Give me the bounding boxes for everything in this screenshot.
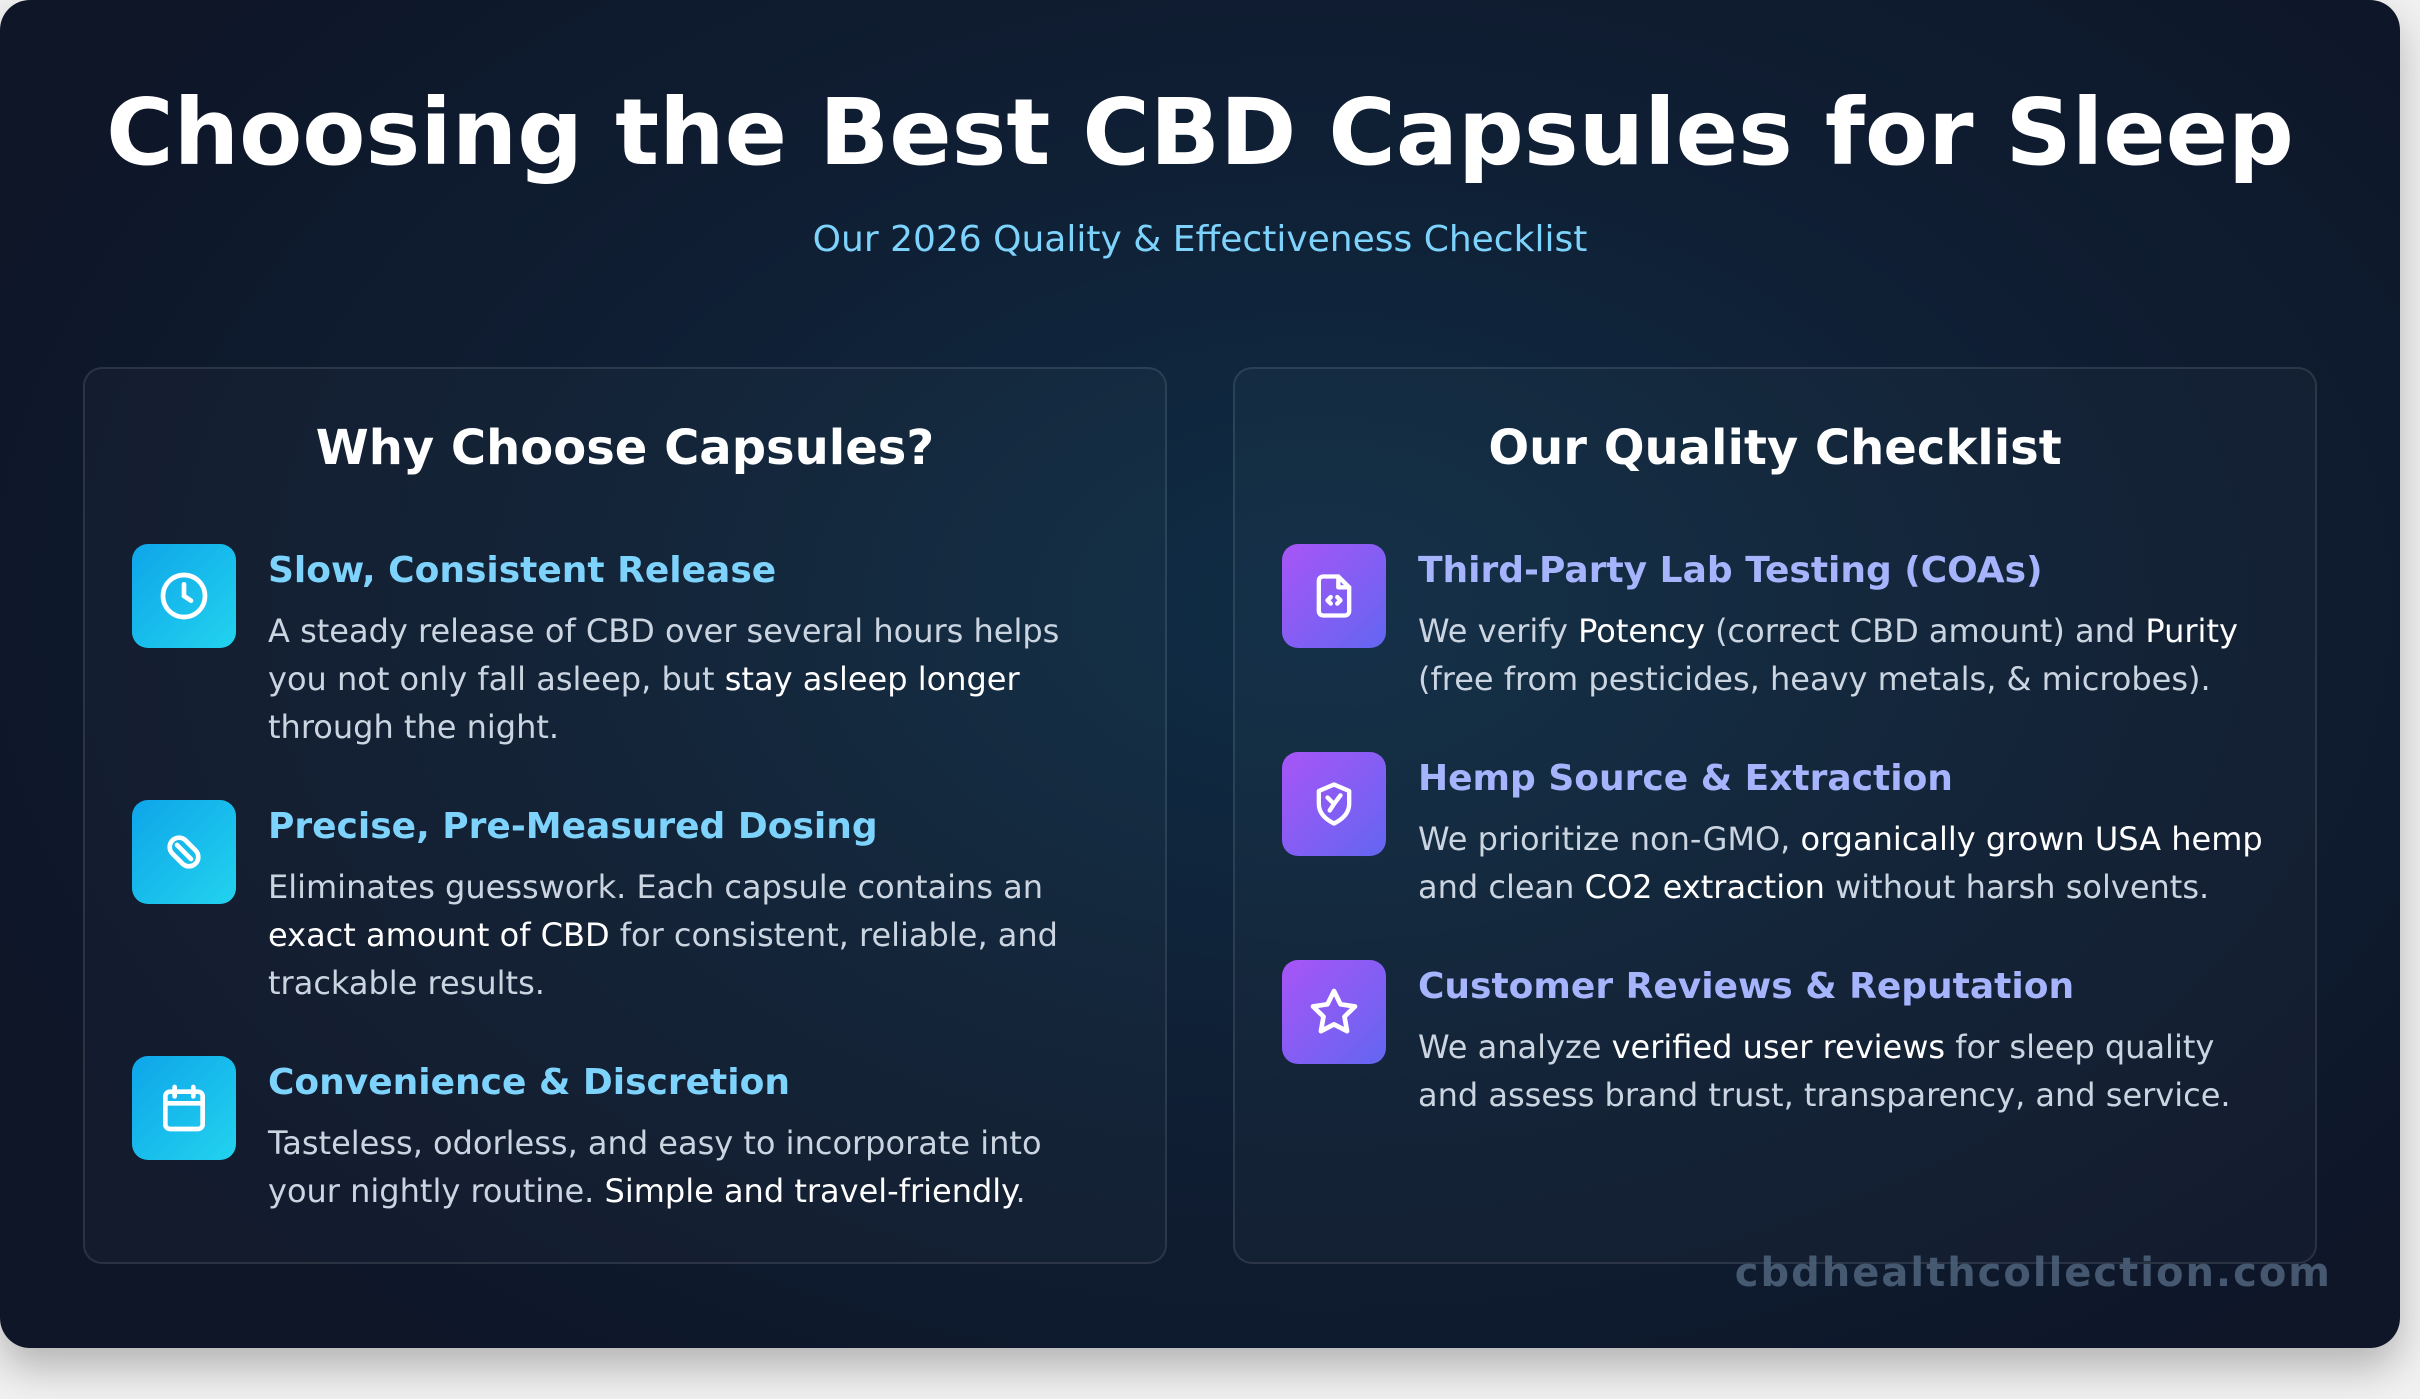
item title: Precise, Pre-Measured Dosing: [268, 806, 878, 847]
item title: Third-Party Lab Testing (COAs): [1418, 550, 2043, 591]
item: precise dosing: [132, 800, 1058, 1002]
item title: Customer Reviews & Reputation: [1418, 966, 2074, 1007]
item text: We verify Potency (correct CBD amount) and Purity (free from pesticides, heavy metals, & microbes).: [1418, 612, 2238, 698]
item text: We prioritize non-GMO, organically grown USA hemp and clean CO2 extraction without harsh solvents.: [1418, 820, 2263, 906]
item: lab testing: [1282, 544, 2238, 698]
panel: quality checklist: [1233, 367, 2317, 1264]
icon: pill: [132, 800, 236, 904]
item: convenience: [132, 1056, 1042, 1210]
watermark: cbdhealthcollection.com: [1735, 1250, 2332, 1296]
panel heading: Our Quality Checklist: [1488, 420, 2062, 476]
icon: shield: [1282, 752, 1386, 856]
item title: Convenience & Discretion: [268, 1062, 790, 1103]
icon: clock: [132, 544, 236, 648]
subtitle: Our 2026 Quality & Effectiveness Checklist: [813, 219, 1587, 260]
item text: We analyze verified user reviews for sleep quality and assess brand trust, transparency, and service.: [1418, 1028, 2231, 1114]
item: slow release: [132, 544, 1059, 746]
panel: why choose capsules: [83, 367, 1167, 1264]
item: reviews: [1282, 960, 2231, 1114]
panel heading: Why Choose Capsules?: [316, 420, 934, 476]
item text: Eliminates guesswork. Each capsule contains an exact amount of CBD for consistent, reliable, and trackable results.: [268, 868, 1058, 1002]
icon: document: [1282, 544, 1386, 648]
item title: Slow, Consistent Release: [268, 550, 776, 591]
icon: calendar: [132, 1056, 236, 1160]
icon: star: [1282, 960, 1386, 1064]
item text: A steady release of CBD over several hours helps you not only fall asleep, but stay asleep longer through the night.: [268, 612, 1059, 746]
title: Choosing the Best CBD Capsules for Sleep: [106, 79, 2294, 186]
item: hemp source: [1282, 752, 2263, 906]
item text: Tasteless, odorless, and easy to incorporate into your nightly routine. Simple and travel-friendly.: [268, 1124, 1042, 1210]
item title: Hemp Source & Extraction: [1418, 758, 1953, 799]
